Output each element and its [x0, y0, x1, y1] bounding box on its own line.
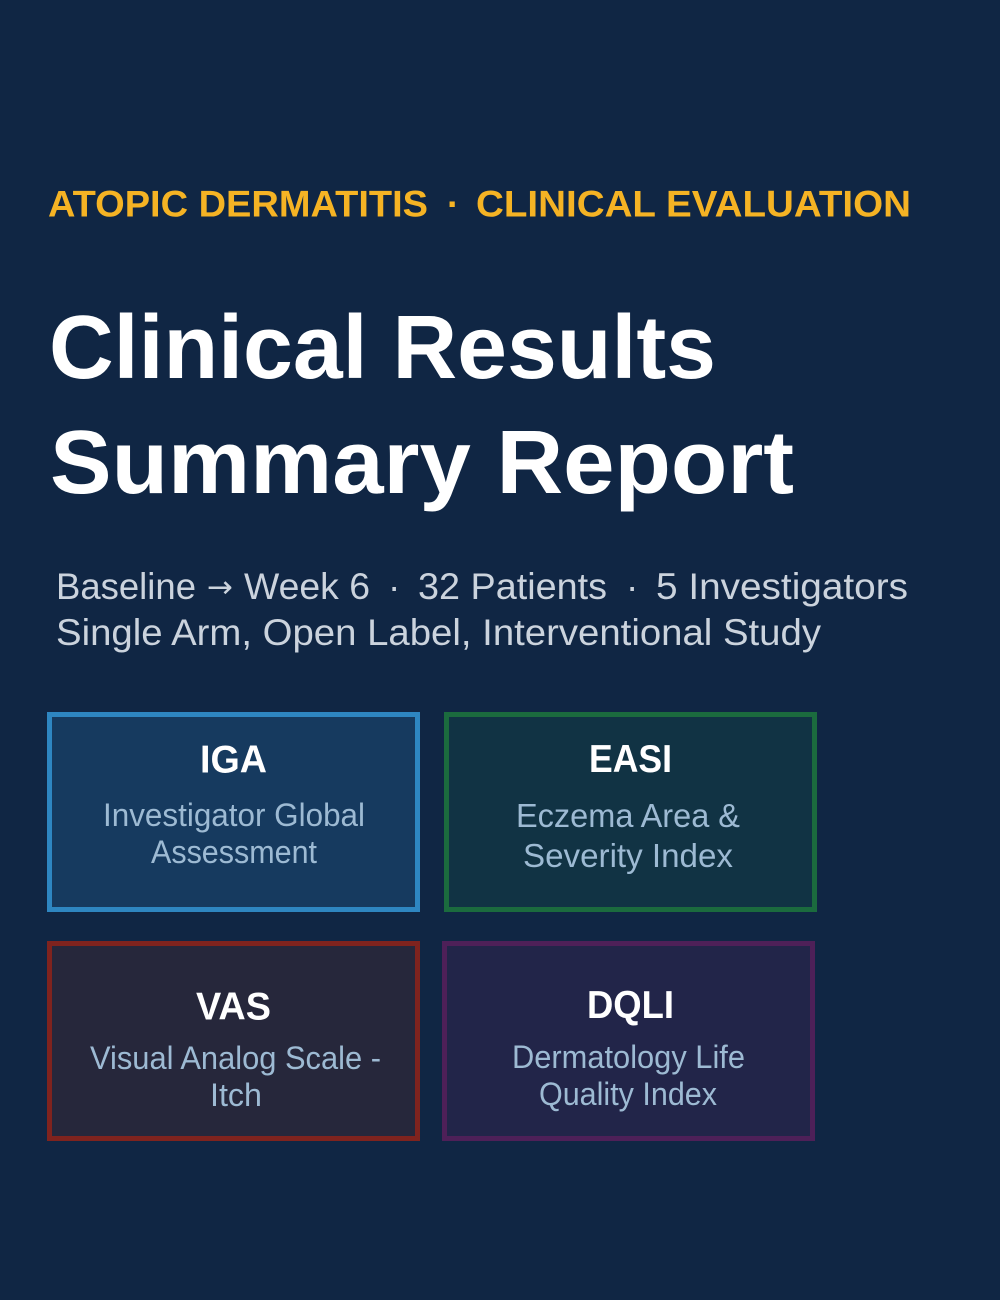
card: EASI: EASI — [589, 738, 672, 781]
card: DQLI: DQLI — [587, 984, 674, 1027]
eyebrow: study category: ATOPIC DERMATITIS — [48, 184, 428, 224]
eyebrow: study category: CLINICAL EVALUATION — [476, 184, 911, 224]
subtitle: study design: Week 6 — [244, 566, 370, 607]
title: Summary Report — [50, 413, 794, 513]
card: IGA: Investigator Global — [103, 797, 365, 833]
eyebrow: study category — [48, 184, 911, 224]
subtitle: study design: · — [388, 566, 400, 607]
card: EASI — [446, 714, 814, 910]
card: IGA: Assessment — [151, 834, 317, 870]
card: EASI: Eczema Area & — [516, 797, 740, 834]
subtitle: study design: Single Arm, Open Label, Interventional Study — [56, 612, 822, 653]
subtitle: study design: 32 Patients — [418, 566, 607, 607]
subtitle: study design: → — [207, 570, 233, 605]
card: IGA — [50, 714, 418, 910]
title — [49, 298, 794, 513]
card: VAS: Itch — [210, 1077, 262, 1113]
subtitle: study design: Baseline — [56, 566, 196, 607]
eyebrow: study category: · — [447, 184, 459, 224]
card: VAS: Visual Analog Scale - — [90, 1040, 381, 1076]
card: VAS: VAS — [196, 986, 271, 1028]
subtitle: study design: · — [626, 566, 638, 607]
card: DQLI — [444, 944, 812, 1138]
card: VAS — [50, 944, 418, 1138]
card: DQLI: Dermatology Life — [512, 1039, 745, 1075]
card: EASI: Severity Index — [523, 837, 733, 874]
subtitle: study design: 5 Investigators — [656, 566, 908, 607]
card: IGA: IGA — [200, 738, 267, 782]
subtitle: study design — [56, 566, 908, 653]
card: DQLI: Quality Index — [539, 1076, 717, 1112]
title: Clinical Results — [49, 298, 716, 398]
